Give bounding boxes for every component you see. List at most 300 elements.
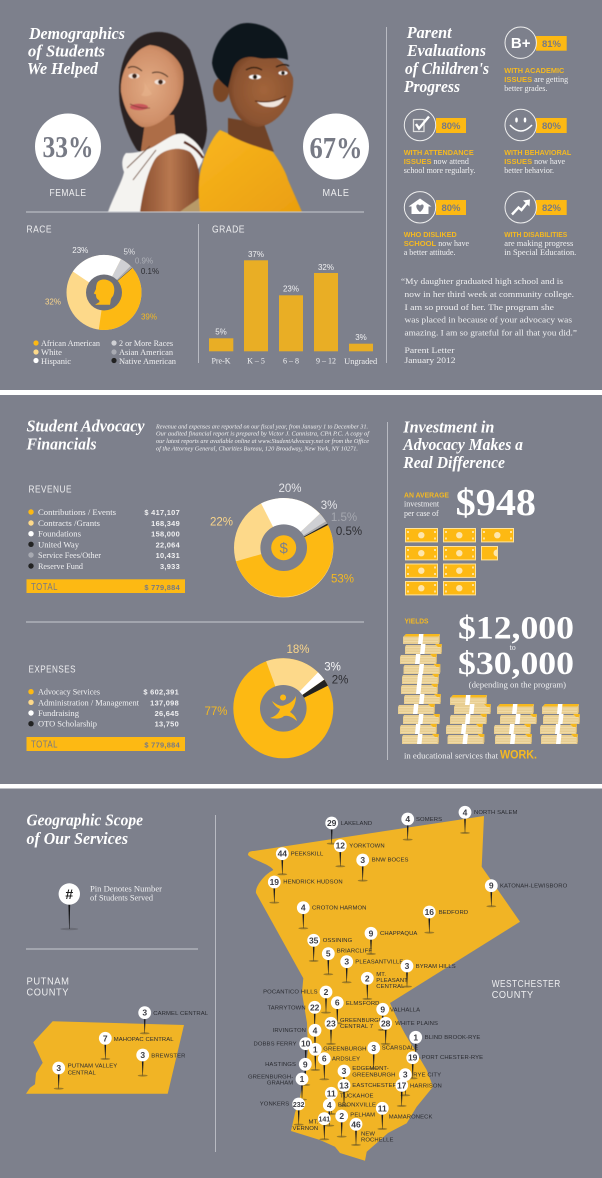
pin: Brewster: 3 [140,1050,145,1060]
pin: Mt. Vernon: MT. [309,1120,319,1126]
pin: White Plains: WHITE PLAINS [395,1021,438,1027]
heading: financials [26,417,145,453]
pin: Port Chester-Rye: 19 [408,1053,418,1063]
pin: Scarsdale: 3 [371,1043,376,1053]
pin: Port Chester-Rye: PORT CHESTER-RYE [422,1055,483,1061]
pin: Carmel Central: 3 [142,1008,147,1018]
pin: White Plains [379,1017,438,1045]
icon: money stack 2 [446,695,491,744]
pin: Scarsdale: SCARSDALE [382,1046,418,1052]
pin: Elmsford [331,996,380,1024]
pin: Ossining [307,934,353,962]
pin: BNW BOCES: BNW BOCES [372,858,409,864]
pin: Hastings: 9 [303,1059,308,1069]
heading: geographic scope [26,811,143,848]
evaluation: behavioral 80%: better behavior. [504,166,554,175]
pin: Hastings: HASTINGS [265,1062,296,1068]
pin: Tuckahoe [325,1087,374,1115]
pin: New Rochelle [350,1118,394,1146]
pin: Briarcliff: 5 [326,949,331,959]
pin: Blind Brook-Rye [409,1031,480,1059]
grade bar chart: 5% [215,328,227,337]
grade bar chart: Ungraded [344,357,377,366]
expenses total bar: TOTAL [31,740,58,751]
pin: Pocantico Hills: POCANTICO HILLS [263,990,318,996]
pin: Valhalla: 9 [380,1004,385,1014]
stat: 67% male: 67% [310,130,362,165]
revenue table: Reserve Fund [38,562,83,571]
stat: average investment $948: per case of [404,509,439,518]
evaluation: behavioral 80% [504,109,572,175]
heading: financials: Financials [26,434,97,453]
pin: Somers: 4 [405,814,410,824]
pin: Edgemont-Greenburgh: GREENBURGH [352,1072,396,1078]
panel: geographic scope [0,788,602,1178]
evaluation: disliked school 80%: 80% [441,203,461,214]
revenue table: 168,349 [151,519,180,528]
revenue donut chart: 1.5% [331,512,357,524]
stat: 67% male: MALE [322,188,350,199]
race legend: Native American [119,357,176,366]
evaluation: attendance 80%: 80% [441,121,461,132]
pin: Yonkers: YONKERS [260,1102,289,1108]
pin: Irvington: IRVINGTON [273,1028,306,1034]
evaluation: academic 81%: WITH ACADEMIC [504,66,565,75]
heading: parent evaluations: Progress [403,77,460,96]
stat: 33% female [35,114,101,199]
pin: Edgemont-Greenburgh: EDGEMONT- [352,1066,389,1072]
pin: Somers [401,813,442,841]
pin: Peekskill: 44 [278,849,287,859]
pin: BNW BOCES: 3 [360,855,365,865]
label: Putnam County: PUTNAM [26,977,70,988]
grade bar chart: 37% [248,250,264,259]
expenses table: $ 602,391 [143,688,179,697]
pin: Tarrytown: TARRYTOWN [267,1005,306,1011]
evaluation: attendance 80%: school more regularly. [404,166,475,175]
race chart [26,225,176,366]
heading: investment: Advocacy Makes a [402,435,523,454]
pin: Harrison: HARRISON [410,1083,442,1089]
pin: Mt. Vernon: 141 [318,1117,330,1124]
stat: average investment $948 [404,482,536,524]
expenses total bar: $ 779,884 [144,741,181,750]
pin: Pleasantville: 3 [344,957,349,967]
heading: investment: Investment in [402,418,494,437]
revenue donut chart: 0.5% [336,526,362,538]
race legend: White [41,348,62,357]
pin: Ardsley: ARDSLEY [332,1056,360,1062]
photo: two students back to back [108,23,302,212]
parent quote: was placed in because of your advocacy was [404,315,573,325]
heading: geographic scope: of Our Services [26,829,128,848]
stat: yields $12,000 to $30,000 [404,610,574,690]
evaluation: disabilities 82%: 82% [542,203,562,214]
label: Westchester County: WESTCHESTER [492,979,561,990]
pin: Peekskill [276,847,324,875]
expenses table: 13,750 [155,720,179,729]
pin: Bedford: BEDFORD [439,910,468,916]
race percentages: 0.9% [135,257,153,266]
grade bar chart: 3% [355,333,367,342]
expenses table: 137,098 [150,698,179,707]
heading: geographic scope: Geographic Scope [26,811,143,830]
stat: average investment $948: investment [404,500,440,509]
race percentages: 32% [45,298,61,306]
pin: Tuckahoe: TUCKAHOE [340,1093,374,1099]
heading: investment: Real Difference [402,453,505,472]
pin: Mahopac Central: MAHOPAC CENTRAL [114,1037,174,1043]
pin: Edgemont-Greenburgh: 3 [342,1066,347,1076]
expenses donut chart: 77% [204,706,228,718]
stat: 33% female: 33% [42,129,94,164]
pin: Blind Brook-Rye: 1 [413,1032,418,1042]
pin: Eastchester [338,1079,397,1107]
heading: parent evaluations: Evaluations [406,41,486,60]
revenue total bar [26,579,185,593]
race percentages: 23% [72,246,88,255]
evaluation: disabilities 82% [504,192,576,257]
pin: New Rochelle: NEW [361,1131,375,1137]
pin: Ossining: OSSINING [323,938,353,944]
pin: Pleasantville [340,955,403,983]
parent quote: Parent Letter [404,345,455,355]
heading: financials: Student Advocacy [26,417,145,436]
pin: Mahopac Central [99,1032,174,1060]
pin: Pleasantville: PLEASANTVILLE [355,959,403,965]
label: Westchester County: COUNTY [492,990,534,1001]
pin: Lakeland: 29 [327,818,337,828]
expenses donut chart: 18% [286,644,310,656]
revenue table: 3,933 [160,562,180,571]
icon: dollar [271,535,296,560]
pin: North Salem: 4 [463,807,468,817]
pin: Yonkers: 232 [293,1102,305,1109]
pin: North Salem: NORTH SALEM [474,810,518,816]
heading: parent evaluations: of Children's [405,59,489,78]
grade bar chart: 6 – 8 [283,356,299,365]
parent quote: amazing. I am so grateful for all that you did.” [404,328,577,338]
pin: Briarcliff [322,947,372,975]
evaluation: disliked school 80% [404,192,470,257]
pin: Ossining: 35 [309,935,319,945]
pin: Pocantico Hills: 2 [324,987,329,997]
pin: Tuckahoe: 11 [327,1088,336,1098]
pin: Mt. Pleasant Central [361,972,408,1000]
pin: Putnam Valley Central [52,1062,117,1090]
pin: White Plains: 28 [381,1018,391,1028]
pin: Byram Hills: BYRAM HILLS [416,964,456,970]
pin: Mamaroneck: MAMARONECK [389,1114,433,1120]
pin: Katonah-Lewisboro: 9 [489,881,494,891]
pin: Harrison: 17 [397,1080,407,1090]
stat: yields $12,000 to $30,000: (depending on the program) [469,681,566,690]
icon: running figure [270,695,297,721]
expenses table: Fundraising [38,709,79,718]
pin: Bronxville: 4 [327,1100,332,1110]
pin: Greenburgh Central 7: CENTRAL 7 [340,1024,373,1030]
evaluation: behavioral 80%: ISSUESnow have [504,157,565,166]
pin legend: # [65,886,73,902]
financial disclosure note: our latest reports are available online at www.StudentAdvocacy.net or from the Office [156,438,369,445]
stat: yields $12,000 to $30,000: YIELDS [404,616,428,625]
label: Putnam County: COUNTY [26,987,69,998]
pin: Rye City [399,1068,441,1096]
pin: Blind Brook-Rye: BLIND BROOK-RYE [425,1035,480,1041]
heading: demographics: of Students [28,42,105,61]
pin: Mt. Pleasant Central: CENTRAL [376,984,405,990]
pin: Mamaroneck [376,1102,433,1130]
pin: Yonkers [260,1098,305,1126]
pin: Harrison [395,1079,442,1107]
pin: Pocantico Hills [263,986,332,1014]
pin: Lakeland [325,817,372,845]
expenses table: 26,645 [155,709,179,718]
expenses table: Advocacy Services [38,688,100,697]
race percentages: 5% [124,248,135,256]
revenue table: REVENUE [28,485,72,496]
pin: Katonah-Lewisboro [485,879,568,907]
revenue table: 22,064 [156,540,181,549]
pin: Carmel Central [138,1006,209,1034]
revenue table: Service Fees/Other [38,551,101,560]
stat: 33% female: FEMALE [50,188,86,199]
pin: Greenburgh Central 7: 23 [326,1018,336,1028]
race percentages: 0.1% [141,267,159,276]
stat: average investment $948: $948 [456,482,536,524]
pin: Scarsdale [367,1042,418,1070]
evaluation: academic 81%: 81% [542,39,562,50]
revenue total bar: $ 779,884 [144,583,181,592]
pin: North Salem [459,806,518,834]
pin: Bronxville [323,1099,376,1127]
pin: Greenburgh 11: GREENBURGH 11 [323,1046,375,1052]
pin: Bronxville: BRONXVILLE [338,1103,376,1109]
race chart: RACE [26,225,52,236]
pin: Somers: SOMERS [416,817,442,823]
pin: Dobbs Ferry [253,1037,312,1065]
pin: Hendrick Hudson: 19 [270,877,279,887]
evaluation: attendance 80%: WITH ATTENDANCE [404,148,474,157]
evaluation: behavioral 80%: 80% [542,121,562,132]
pin: Croton Harmon: 4 [301,903,306,913]
grade bar chart: Pre-K [211,356,231,365]
revenue donut chart: 3% [321,500,337,512]
pin: Mahopac Central: 7 [103,1033,108,1043]
pin: Bedford [423,906,468,934]
evaluation: attendance 80%: ISSUESnow attend [404,157,469,166]
pin legend: of Students Served [90,894,153,903]
revenue table: 10,431 [156,551,180,560]
heading: investment [402,418,523,472]
pin: Byram Hills [401,960,456,988]
evaluation: academic 81% [504,27,568,93]
pin: Ardsley: 6 [322,1054,327,1064]
grade bar chart: GRADE [212,225,245,236]
heading: demographics: Demographics [28,24,125,43]
evaluation: attendance 80% [404,109,475,175]
heading: demographics: We Helped [27,59,99,78]
expenses table: OTO Scholarship [38,720,97,729]
evaluation: disabilities 82%: WITH DISABILITIES [504,230,567,239]
grade bar chart: 23% [283,284,299,294]
pin: Yorktown: 12 [336,841,345,851]
financial disclosure note: of the Attorney General, Charities Bureau, 120 Broadway, New York, NY 10271. [156,445,358,452]
pin: Elmsford: ELMSFORD [346,1001,380,1007]
evaluation: disabilities 82%: are making progress [504,239,573,248]
pin: Mamaroneck: 11 [378,1103,387,1113]
revenue table [26,485,185,593]
expenses total bar [26,737,185,751]
parent quote: now in her third week at community college. [404,289,574,299]
expenses donut chart [204,644,348,758]
panel: financials and investment [0,395,602,784]
grade bar chart: 9 – 12 [316,356,336,365]
pin: Putnam Valley Central: CENTRAL [68,1070,97,1076]
map: Putnam County [26,1006,209,1094]
pin: Mt. Vernon [292,1112,331,1140]
evaluation: academic 81%: ISSUESare getting [504,75,568,84]
expenses table: Administration / Management [38,698,140,707]
pin: Yorktown: YORKTOWN [349,844,385,850]
educational services caption: in educational services that [404,752,499,761]
grade bar chart: K – 5 [247,356,265,365]
pin legend: Pin Denotes Number [90,885,162,894]
icon: money stack 4 [540,704,580,744]
icon: dollar: $ [280,540,289,557]
pin: Port Chester-Rye [406,1051,483,1079]
pin: Hendrick Hudson [268,876,343,904]
panel: demographics and parent evaluations [0,0,602,390]
revenue table: Contributions / Events [38,508,116,517]
evaluation: academic 81%: B+ [511,35,531,52]
stat: yields $12,000 to $30,000: $12,000 [458,610,574,646]
revenue table: Contracts /Grants [38,519,100,528]
race legend: Hispanic [41,357,71,366]
parent quote: January 2012 [404,355,456,365]
evaluation: disliked school 80%: WHO DISLIKED [404,230,457,239]
pin: Eastchester: 13 [339,1080,349,1090]
pin: Peekskill: PEEKSKILL [291,852,324,858]
pin: Irvington [273,1024,321,1052]
revenue donut chart: 22% [210,517,233,529]
educational services caption [404,750,537,762]
financial disclosure note: Revenue and expenses are reported on our fiscal year, from January 1 to December 31. [155,423,368,430]
pin: Tarrytown [267,1001,321,1029]
race donut [66,255,142,330]
revenue table: United Way [38,540,79,549]
pin: Irvington: 4 [313,1025,318,1035]
race legend: 2 or More Races [119,339,173,348]
pin: Mt. Pleasant Central: MT. [376,972,386,978]
parent quote: I am so proud of her. The program she [404,302,554,312]
label: Putnam County [26,977,70,998]
pin: Croton Harmon: CROTON HARMON [312,905,367,911]
pin: Yorktown [334,839,385,867]
revenue table: 158,000 [151,530,180,539]
expenses table: EXPENSES [28,664,76,675]
pin: Carmel Central: CARMEL CENTRAL [153,1011,209,1017]
expenses table [26,664,185,751]
grade bar chart: 32% [318,263,334,272]
pin: Bedford: 16 [425,907,434,917]
educational services caption: WORK. [500,750,537,762]
pin: Mt. Pleasant Central: PLEASANT [376,978,408,984]
revenue donut chart [210,483,362,597]
parent quote [401,276,577,365]
pin: Rye City: 3 [403,1070,408,1080]
evaluation: disliked school 80%: SCHOOLnow have [404,239,470,248]
race percentages: 39% [141,312,157,322]
pin: Croton Harmon [297,901,367,929]
expenses donut chart: 3% [324,662,341,674]
parent quote: “My daughter graduated high school and is [401,276,564,286]
pin: Valhalla [376,1003,420,1031]
revenue table: Foundations [38,530,81,539]
pin: Mt. Pleasant Central: 2 [365,973,370,983]
pin: Byram Hills: 3 [405,961,410,971]
pin: Chappaqua: 9 [369,928,374,938]
pin: Putnam Valley Central: PUTNAM VALLEY [68,1064,117,1070]
pin: Dobbs Ferry: DOBBS FERRY [253,1042,297,1048]
pin: Greenburgh Central 7 [325,1017,383,1045]
icon: money stack 1 [398,634,442,744]
pin: Brewster [136,1049,185,1077]
icon: stack of bills [406,528,514,595]
map: Westchester County [248,806,568,1161]
pin: Chappaqua [365,927,417,955]
revenue total bar: TOTAL [31,582,58,593]
revenue donut chart: 20% [278,483,302,495]
race legend: African American [41,339,100,348]
revenue table: $ 417,107 [144,508,180,517]
pin: Greenburgh-Graham: 1 [300,1074,305,1084]
evaluation: academic 81%: better grades. [504,84,547,93]
pin: Hendrick Hudson: HENDRICK HUDSON [283,879,343,885]
pin: Greenburgh-Graham [248,1073,308,1101]
pin: Brewster: BREWSTER [151,1054,185,1060]
pin: Elmsford: 6 [335,998,340,1008]
pin: Pelham [335,1110,375,1138]
pin: Greenburgh-Graham: GRAHAM [267,1080,293,1086]
pin: Greenburgh 11: 1 [313,1044,318,1054]
grade bar chart [209,225,377,366]
pin: Greenburgh 11 [309,1043,375,1071]
pin: Hastings [265,1058,312,1086]
pin: Pelham: 2 [339,1111,344,1121]
pin: Briarcliff: BRIARCLIFF [337,948,372,954]
expenses donut chart: 2% [332,675,348,687]
financial disclosure note [155,423,370,452]
stat: yields $12,000 to $30,000: to [510,643,516,652]
pin: Greenburgh-Graham: GREENBURGH- [248,1074,293,1080]
race legend: Asian American [119,348,173,357]
heading: parent evaluations: Parent [406,23,452,42]
pin: Mt. Vernon: VERNON [292,1126,318,1132]
pin: Greenburgh Central 7: GREENBURGH [340,1018,383,1024]
pin: Edgemont-Greenburgh [338,1065,396,1093]
race percentages [45,246,159,322]
pin: Tarrytown: 22 [310,1002,320,1012]
pin: Ardsley [318,1052,360,1080]
pin: Putnam Valley Central: 3 [56,1063,61,1073]
icon: money stack 3 [494,704,537,744]
evaluation: disabilities 82%: in Special Education. [504,248,576,257]
pin: Chappaqua: CHAPPAQUA [380,931,417,937]
pin: Eastchester: EASTCHESTER [352,1083,397,1089]
pin: Rye City: RYE CITY [413,1072,441,1078]
stat: 67% male [303,114,369,199]
